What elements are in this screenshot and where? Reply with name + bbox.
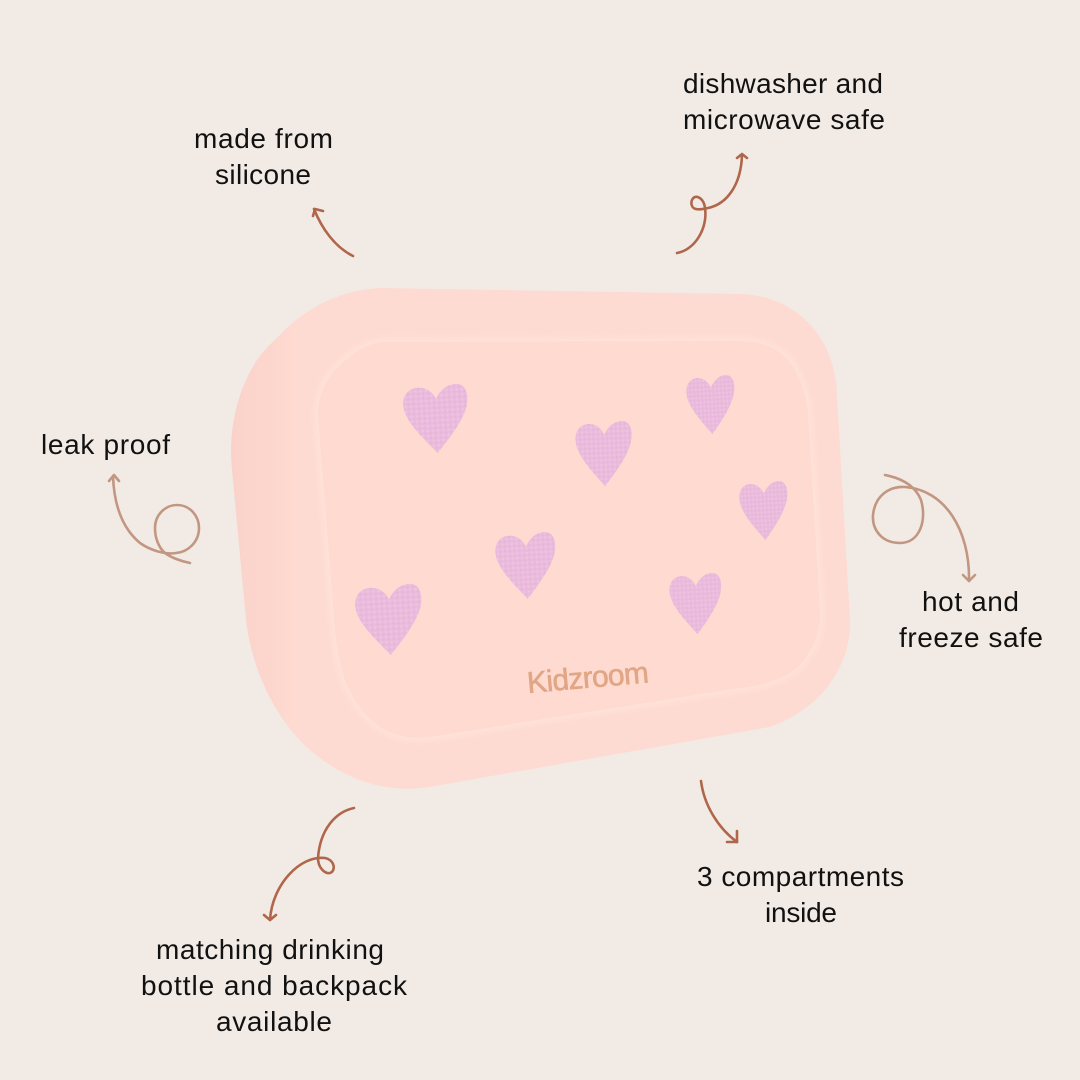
arrow: made from silicone: [313, 209, 353, 256]
label: matching drinking bottle and backpack available: matching drinking: [156, 934, 384, 965]
arrow: matching drinking bottle: [264, 808, 354, 920]
label: hot and freeze safe: [899, 586, 1043, 653]
arrow: dishwasher and microwave safe: [677, 154, 747, 253]
arrow: 3 compartments inside: [701, 781, 737, 842]
label: made from silicone: made from: [194, 123, 333, 154]
label: made from silicone: silicone: [215, 159, 311, 190]
label: made from silicone: [194, 123, 333, 190]
brand logo: Kidzroom: [526, 656, 650, 700]
lid inner panel highlight: [318, 341, 820, 738]
heart prints: [354, 375, 790, 657]
arrow: leak proof: [109, 475, 199, 563]
label: dishwasher and microwave safe: dishwasher and: [683, 68, 883, 99]
label: matching drinking bottle and backpack available: bottle and backpack: [141, 970, 408, 1001]
label: leak proof: leak proof: [41, 429, 170, 460]
label: dishwasher and microwave safe: microwave safe: [683, 104, 885, 135]
label: hot and freeze safe: hot and: [922, 586, 1019, 617]
label: dishwasher and microwave safe: [683, 68, 885, 135]
label: hot and freeze safe: freeze safe: [899, 622, 1043, 653]
label: 3 compartments inside: 3 compartments: [697, 861, 904, 892]
arrow: hot and freeze safe: [873, 475, 975, 581]
product: lunch box: [231, 288, 850, 789]
label: 3 compartments inside: inside: [765, 897, 837, 928]
label: matching drinking bottle and backpack available: available: [216, 1006, 332, 1037]
box outer body: [231, 288, 850, 789]
label: matching drinking bottle and backpack available: [141, 934, 408, 1037]
label: 3 compartments inside: [697, 861, 904, 928]
lid inner panel: [318, 341, 820, 738]
